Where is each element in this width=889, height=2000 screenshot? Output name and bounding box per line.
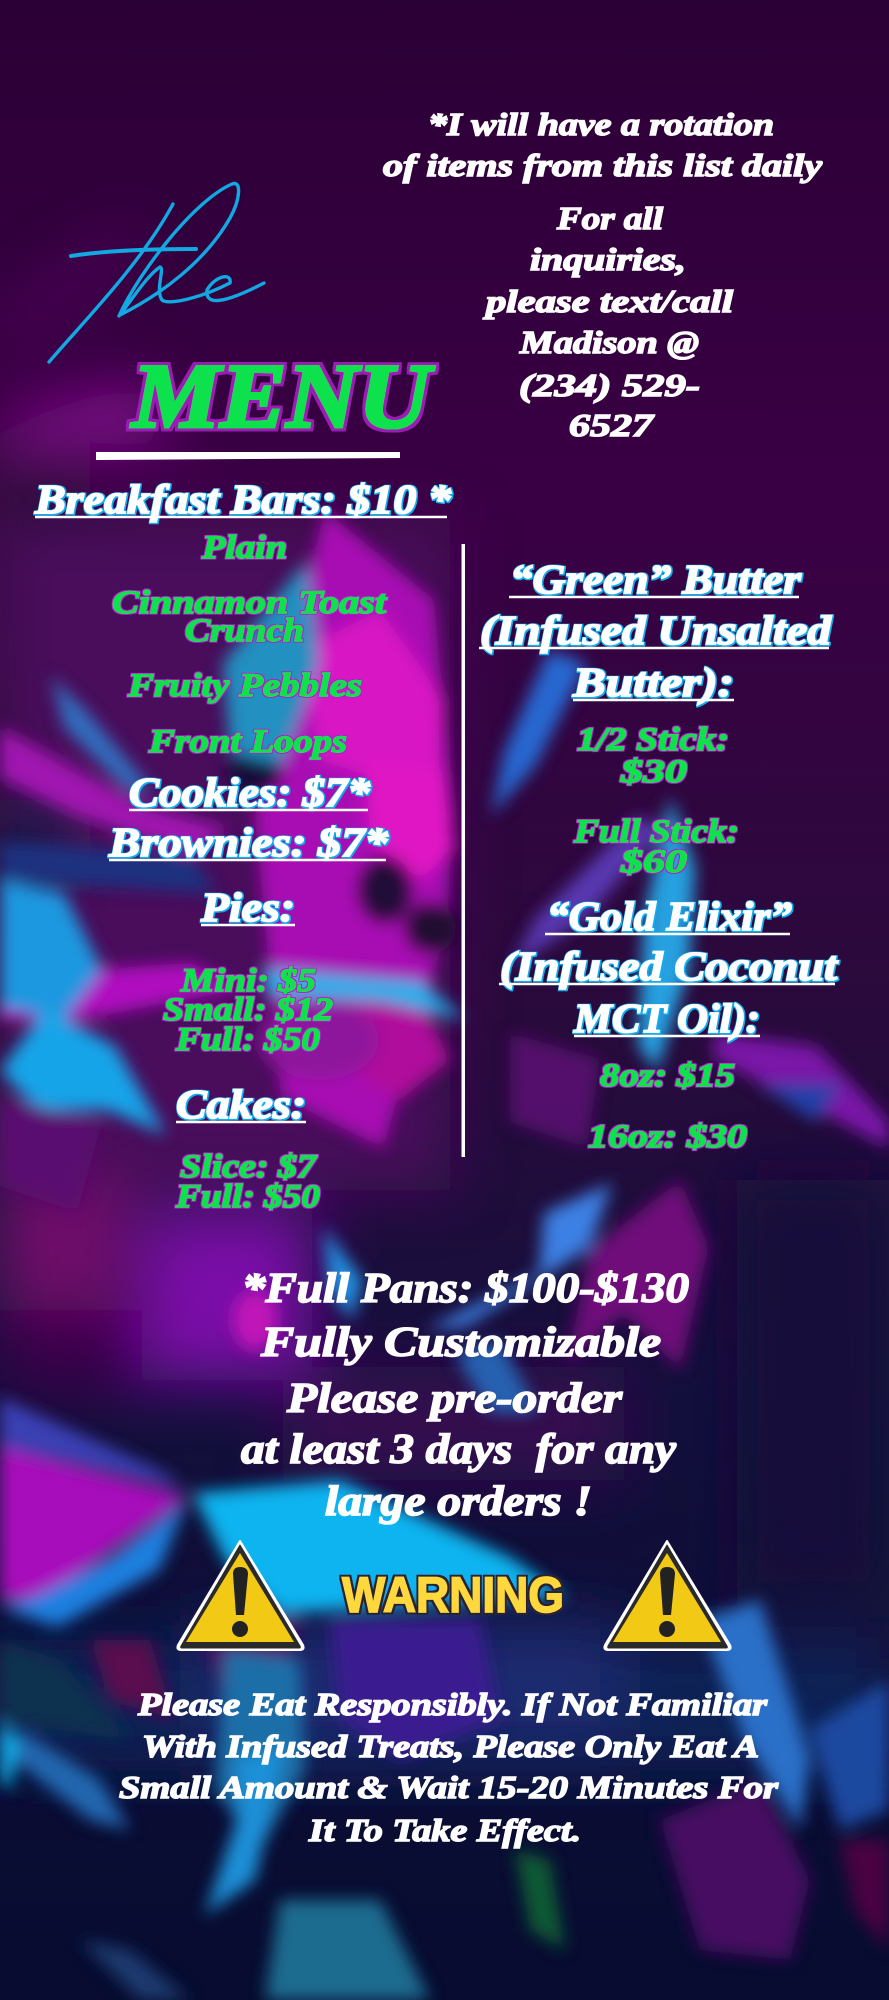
heading: gold elixir: “Gold Elixir” <box>547 893 792 939</box>
full pans note: large orders ! <box>325 1479 592 1525</box>
full pans note: Fully Customizable <box>260 1320 661 1366</box>
column: right menu <box>479 556 839 1155</box>
warning text: Small Amount & Wait 15-20 Minutes For <box>119 1769 779 1805</box>
pie prices <box>163 963 333 1058</box>
warning text: Please Eat Responsibly. If Not Familiar <box>137 1686 768 1722</box>
butter prices <box>573 722 739 880</box>
soft colour fields <box>0 217 889 1770</box>
butter prices: $60 <box>620 844 687 880</box>
breakfast bar flavours <box>112 530 387 760</box>
script title: the <box>49 183 264 362</box>
heading: green butter: (Infused Unsalted <box>480 607 832 653</box>
rotation note: *I will have a rotation <box>428 106 774 142</box>
heading: gold elixir: (Infused Coconut <box>500 943 839 989</box>
rotation note: of items from this list daily <box>383 147 823 183</box>
cake prices: Slice: $7 <box>180 1149 318 1185</box>
heading: brownies: Brownies: $7* <box>108 819 389 865</box>
contact details: please text/call <box>482 283 733 319</box>
lower centre plant <box>425 1183 612 1330</box>
full pans note: Please pre-order <box>286 1376 623 1422</box>
pie prices: Full: $50 <box>175 1022 320 1058</box>
title underline <box>96 452 400 460</box>
contact details: Madison @ <box>519 324 699 360</box>
contact details <box>482 200 733 443</box>
pie prices: Small: $12 <box>163 992 333 1028</box>
icon: warning triangle right <box>604 1541 731 1650</box>
heading: gold elixir <box>499 893 839 1041</box>
elixir prices <box>588 1058 747 1155</box>
column divider <box>462 544 465 1157</box>
warning text: It To Take Effect. <box>308 1812 581 1848</box>
heading: breakfast bars: Breakfast Bars: $10 * <box>34 476 452 522</box>
rotation note <box>383 106 823 183</box>
heading: gold elixir: MCT Oil): <box>573 995 760 1041</box>
heading: green butter: Butter): <box>572 659 734 705</box>
heading: green butter: “Green” Butter <box>510 556 802 602</box>
heading: cookies: Cookies: $7* <box>129 769 371 815</box>
elixir prices: 8oz: $15 <box>600 1058 735 1094</box>
butter prices: $30 <box>620 754 687 790</box>
breakfast bar flavours: Plain <box>201 530 287 566</box>
contact details: (234) 529- <box>519 367 700 403</box>
contact details: 6527 <box>569 407 656 443</box>
breakfast bar flavours: Fruity Pebbles <box>127 668 362 704</box>
breakfast bar flavours: Front Loops <box>148 724 347 760</box>
title: MENU: MENU <box>130 345 435 447</box>
elixir prices: 16oz: $30 <box>588 1119 747 1155</box>
butter prices: Full Stick: <box>573 814 739 850</box>
icon: warning triangle left <box>177 1541 304 1650</box>
cake prices <box>175 1149 320 1215</box>
leaves <box>0 510 889 2000</box>
warning heading: WARNING <box>342 1567 564 1623</box>
full pans note <box>241 1266 689 1525</box>
full pans note: *Full Pans: $100-$130 <box>242 1266 689 1312</box>
breakfast bar flavours: Crunch <box>185 613 304 649</box>
cake prices: Full: $50 <box>175 1179 320 1215</box>
pie prices: Mini: $5 <box>180 963 316 999</box>
heading: cakes: Cakes: <box>176 1081 306 1127</box>
full pans note: at least 3 days for any <box>241 1427 676 1473</box>
warning text: With Infused Treats, Please Only Eat A <box>142 1728 759 1764</box>
butter prices: 1/2 Stick: <box>577 722 729 758</box>
heading: pies: Pies: <box>200 884 295 930</box>
warning text <box>119 1686 779 1848</box>
column: left menu <box>34 476 452 1215</box>
contact details: inquiries, <box>530 241 686 277</box>
contact details: For all <box>556 200 663 236</box>
heading: green butter <box>479 556 832 705</box>
breakfast bar flavours: Cinnamon Toast <box>112 585 387 621</box>
